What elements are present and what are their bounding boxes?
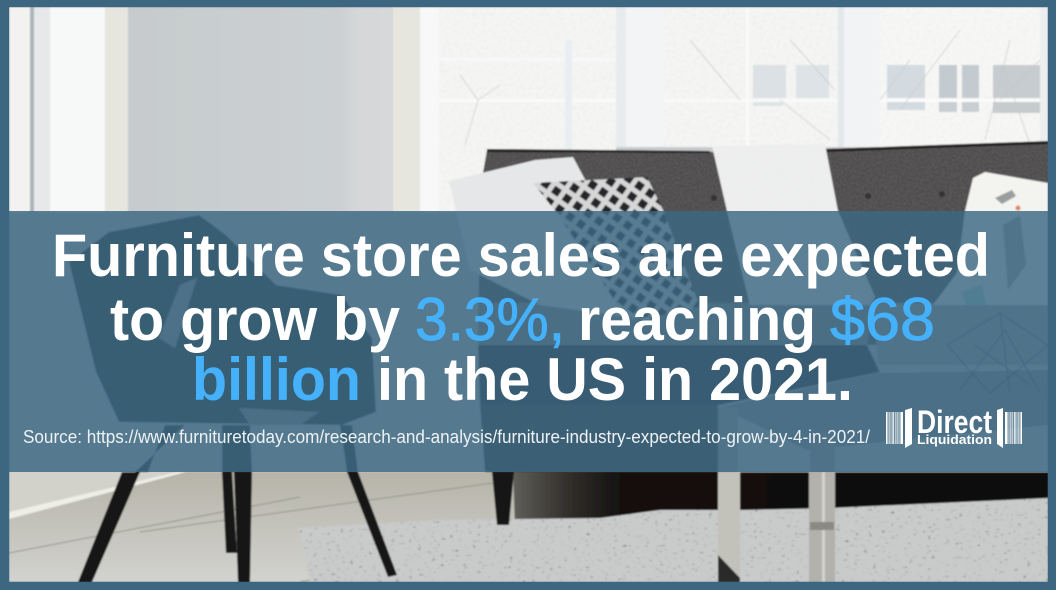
- highlighted percentage: 3.3%,: [415, 286, 565, 353]
- sofa leg: [492, 472, 514, 525]
- coffee table: [718, 370, 1048, 477]
- headline: [52, 222, 990, 413]
- grey wall panel: [348, 8, 392, 211]
- logo right barcode: [1005, 412, 1022, 444]
- window panes and mullions: [439, 7, 1048, 212]
- white cushion: [449, 157, 650, 320]
- right cushion print: [962, 190, 1026, 305]
- translucent text band: [9, 211, 1048, 472]
- baseboard: [9, 472, 186, 519]
- chrome table legs: [718, 472, 835, 582]
- highlighted billion: billion: [192, 346, 361, 413]
- logo right flag: [997, 408, 1003, 448]
- logo word Direct: Direct: [917, 404, 992, 440]
- wall trim: [393, 7, 420, 212]
- headline line 1: Furniture store sales are expected: [52, 222, 990, 289]
- sofa back: [478, 142, 1048, 345]
- floor: [9, 472, 520, 582]
- highlighted amount: $68: [830, 286, 935, 353]
- logo word Liquidation: Liquidation: [917, 432, 992, 447]
- headline line 2 middle: reaching: [578, 286, 816, 353]
- logo left barcode: [886, 412, 903, 444]
- logo left flag: [905, 408, 912, 448]
- rug: [298, 498, 1048, 582]
- chair legs: [78, 472, 397, 582]
- window wall background: [9, 146, 1048, 474]
- sofa top seam: [487, 141, 1048, 153]
- wire sculpture: [948, 313, 1048, 374]
- sofa seat cushion: [478, 303, 873, 347]
- sofa front rail: [478, 345, 880, 405]
- logo: Direct Liquidation: [886, 404, 1022, 448]
- right cushion: [933, 172, 1048, 305]
- bare tree branches: [460, 30, 1040, 145]
- white throw blanket: [712, 144, 875, 305]
- wall below chair: [10, 472, 168, 510]
- dark area under sofa: [513, 472, 1048, 525]
- left door glass and frame: [9, 7, 128, 212]
- chair: [69, 215, 376, 472]
- headline line 2 start: to grow by: [110, 286, 401, 353]
- sofa tufting buttons: [711, 191, 945, 201]
- patterned cushion: [533, 177, 700, 320]
- source citation: Source: https://www.furnituretoday.com/research-and-analysis/furniture-industry-expected-to-grow-by-4-in-2021/: [23, 426, 871, 447]
- headline line 3: in the US in 2021.: [377, 346, 853, 413]
